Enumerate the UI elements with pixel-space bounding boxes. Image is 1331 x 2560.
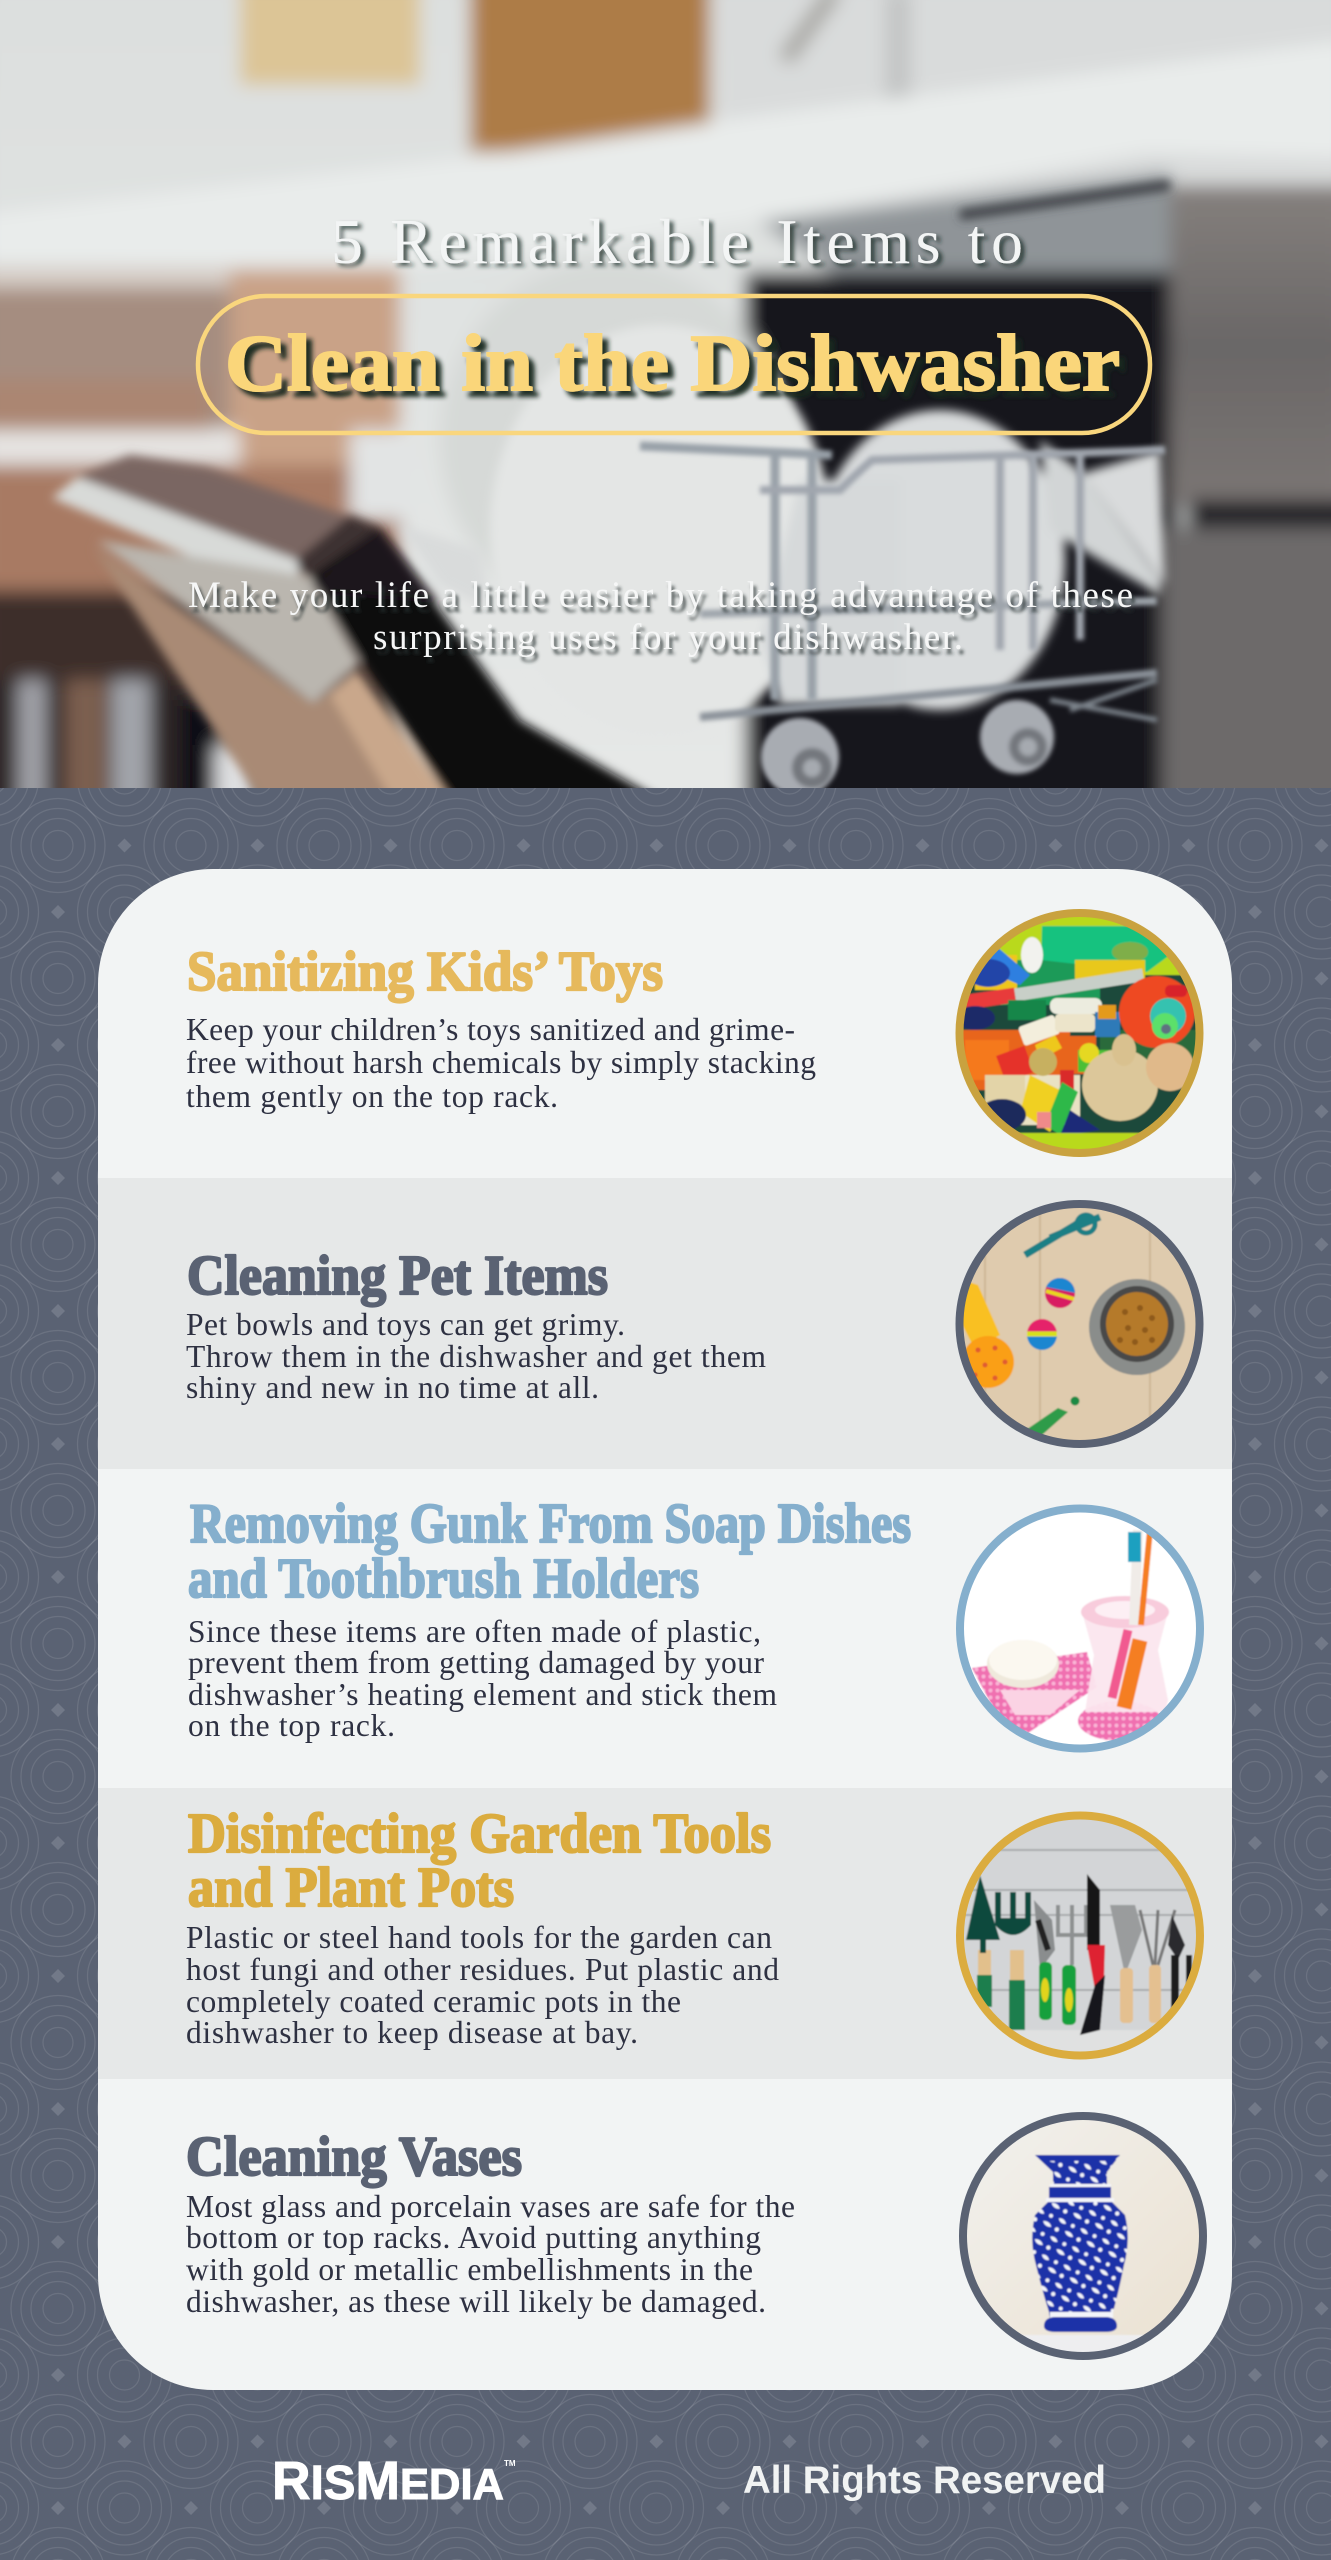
body 4: Plastic or steel hand tools for the garden can — [186, 1920, 772, 1955]
footer logo: RISMedia: RISMEDIA — [272, 2451, 504, 2511]
body 1: free without harsh chemicals by simply stacking — [186, 1045, 816, 1080]
card: row 2 band — [98, 1178, 1232, 1469]
body 3: Since these items are often made of plastic, — [188, 1614, 761, 1649]
hero title: Clean in the Dishwasher: Clean in the Dishwasher — [225, 318, 1120, 408]
body 2 — [186, 1307, 766, 1405]
hero title: first line: 5 Remarkable Items to — [331, 206, 1023, 277]
section 3: soap dishes and toothbrush holders — [188, 1493, 1205, 1755]
body 2: Pet bowls and toys can get grimy. — [186, 1307, 625, 1342]
hero photo: dishwasher — [0, 0, 1331, 818]
section 4: garden tools and plant pots — [186, 1803, 1205, 2061]
body 2: shiny and new in no time at all. — [186, 1370, 599, 1405]
body 4: completely coated ceramic pots in the — [186, 1984, 681, 2019]
body 3: dishwasher’s heating element and stick them — [188, 1677, 777, 1712]
heading 1: Sanitizing Kids’ Toys — [187, 941, 663, 1003]
body 5: bottom or top racks. Avoid putting anything — [186, 2220, 761, 2255]
card: row 4 band — [98, 1788, 1232, 2079]
heading 4: and Plant Pots — [188, 1857, 514, 1919]
body 3: prevent them from getting damaged by your — [188, 1645, 764, 1680]
body 3 — [188, 1614, 777, 1743]
main card — [98, 869, 1232, 2390]
body 5: with gold or metallic embellishments in the — [186, 2252, 753, 2287]
body 2: Throw them in the dishwasher and get them — [186, 1339, 766, 1374]
hero subtitle — [188, 575, 1133, 658]
body 4: dishwasher to keep disease at bay. — [186, 2015, 638, 2050]
photo: pet items — [955, 1200, 1205, 1450]
body 1 — [186, 1012, 816, 1114]
section 2: cleaning pet items — [186, 1200, 1205, 1450]
heading 4 — [188, 1803, 771, 1919]
heading 2: Cleaning Pet Items — [187, 1245, 608, 1307]
heading 3: and Toothbrush Holders — [188, 1548, 699, 1610]
heading 3 — [188, 1493, 911, 1610]
heading 4: Disinfecting Garden Tools — [188, 1803, 771, 1865]
footer: all rights reserved: All Rights Reserved — [743, 2459, 1106, 2502]
body 4 — [186, 1920, 779, 2050]
section 5: cleaning vases — [186, 2112, 1211, 2365]
heading 3: Removing Gunk From Soap Dishes — [190, 1493, 911, 1555]
page background pattern — [0, 788, 1331, 2560]
photo: soap dish and toothbrush holder — [955, 1505, 1205, 1755]
body 4: host fungi and other residues. Put plastic and — [186, 1952, 779, 1987]
heading 5: Cleaning Vases — [186, 2126, 522, 2188]
footer logo: RISMedia: TM — [504, 2459, 516, 2468]
section 1: sanitizing kids' toys — [186, 909, 1205, 1160]
photo: toys — [955, 909, 1205, 1160]
body 5: Most glass and porcelain vases are safe for the — [186, 2189, 795, 2224]
body 5 — [186, 2189, 795, 2319]
hero subtitle: Make your life a little easier by taking advantage of these — [188, 575, 1133, 616]
body 1: them gently on the top rack. — [186, 1079, 558, 1114]
body 1: Keep your children’s toys sanitized and grime- — [186, 1012, 795, 1047]
hero subtitle: surprising uses for your dishwasher. — [373, 617, 963, 658]
photo: garden tools — [955, 1811, 1205, 2061]
body 5: dishwasher, as these will likely be damaged. — [186, 2284, 766, 2319]
photo: blue vase — [955, 2112, 1211, 2365]
body 3: on the top rack. — [188, 1708, 395, 1743]
hero title pill — [198, 296, 1150, 433]
